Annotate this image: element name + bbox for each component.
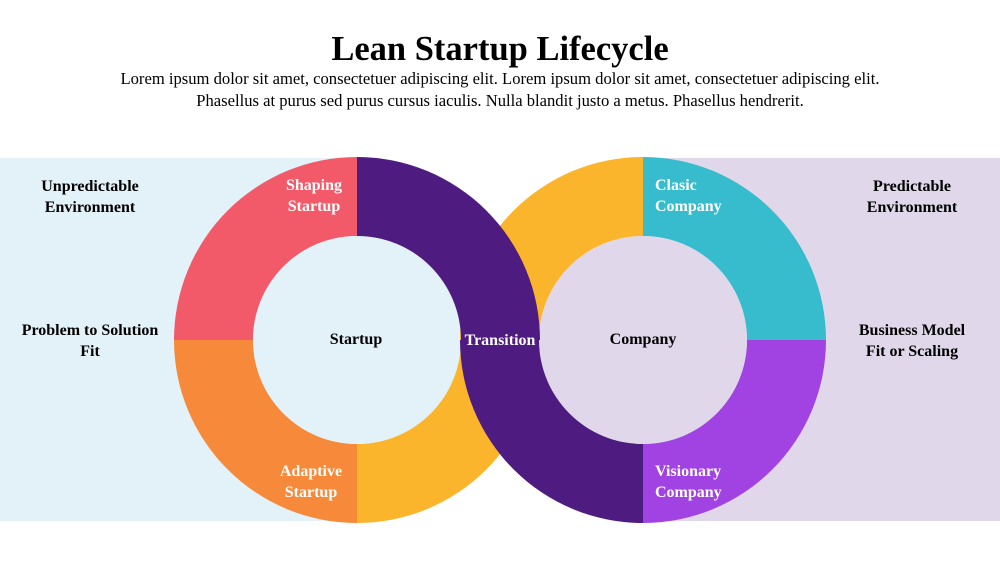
label: problem to solution fit xyxy=(22,322,158,360)
right ring xyxy=(460,157,826,523)
subtitle text: Phasellus at purus sed purus cursus iaculis. Nulla blandit justo a metus. Phasellus hendrerit. xyxy=(196,91,804,110)
label: predictable environment: Predictable xyxy=(873,178,951,195)
title: Lean Startup Lifecycle xyxy=(331,30,669,68)
label: unpredictable environment: Unpredictable xyxy=(41,178,139,195)
segment label: visionary company xyxy=(655,463,722,501)
label: business model: Fit or Scaling xyxy=(866,343,958,360)
subtitle text: Lorem ipsum dolor sit amet, consectetuer adipiscing elit. Lorem ipsum dolor sit amet, consectetuer adipiscing elit. xyxy=(120,69,879,88)
segment label: adaptive startup: Startup xyxy=(285,484,337,501)
segment label: shaping startup xyxy=(286,177,342,215)
label: problem to solution fit: Problem to Solution xyxy=(22,322,158,339)
label: problem to solution fit: Fit xyxy=(80,343,100,360)
segment label: adaptive startup xyxy=(280,463,342,501)
segment label: shaping startup: Startup xyxy=(288,198,340,215)
segment label: visionary company: Company xyxy=(655,484,722,501)
center label: startup: Startup xyxy=(330,331,382,348)
segment label: clasic company: Clasic xyxy=(655,177,697,194)
segment label: shaping startup: Shaping xyxy=(286,177,342,194)
left ring xyxy=(174,157,540,523)
segment label: visionary company: Visionary xyxy=(655,463,721,480)
center label: company: Company xyxy=(610,331,676,348)
transition band xyxy=(357,157,643,523)
label: business model: Business Model xyxy=(859,322,965,339)
subtitle text xyxy=(120,69,879,110)
label: predictable environment: Environment xyxy=(867,199,957,216)
center label: transition: Transition xyxy=(465,332,535,349)
label: unpredictable environment xyxy=(41,178,139,216)
segment label: clasic company xyxy=(655,177,722,215)
label: predictable environment xyxy=(867,178,958,216)
segment label: adaptive startup: Adaptive xyxy=(280,463,342,480)
label: business model xyxy=(859,322,965,360)
segment label: clasic company: Company xyxy=(655,198,722,215)
label: unpredictable environment: Environment xyxy=(45,199,135,216)
